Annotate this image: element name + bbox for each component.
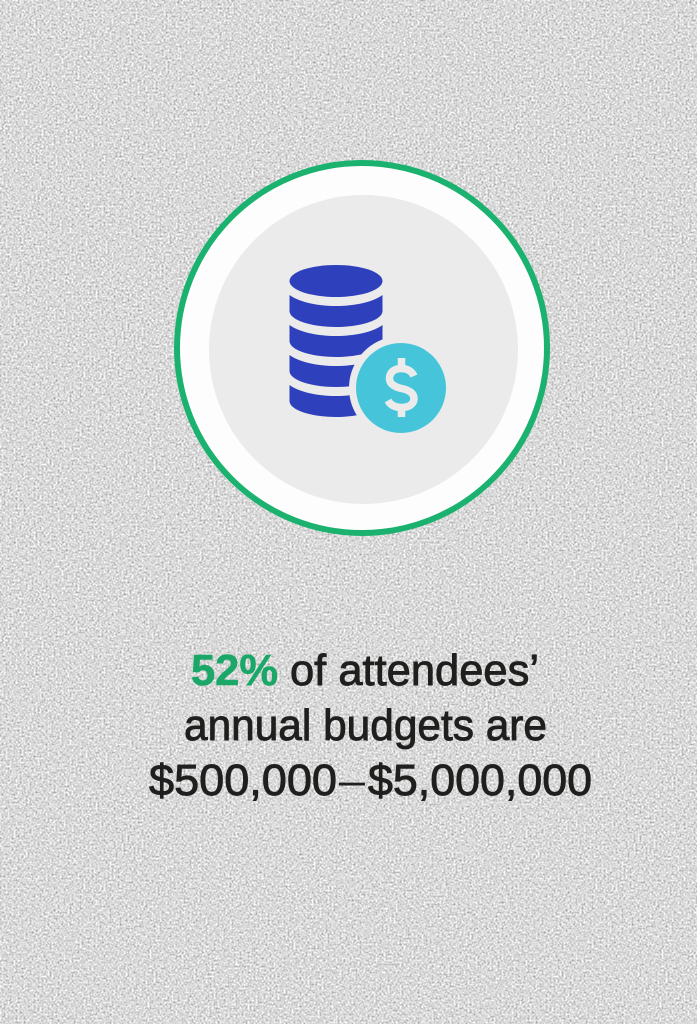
dash: —	[339, 756, 365, 805]
dollar sign	[388, 358, 414, 417]
line 3	[149, 756, 592, 805]
second amount: $5,000,000	[368, 756, 592, 805]
line 1 remainder: of attendees’	[290, 646, 539, 695]
line 1: 52% of attendees	[191, 646, 539, 695]
inner grey circle	[209, 195, 518, 504]
outer white circle with green ring	[177, 163, 547, 533]
caption text	[149, 646, 592, 805]
coin stack	[290, 265, 382, 417]
line 2: annual budgets are	[184, 701, 547, 750]
first amount: $500,000	[149, 756, 337, 805]
badge: circular icon medallion	[177, 163, 547, 533]
dollar coin	[356, 343, 446, 433]
icon: stack of coins with dollar	[290, 265, 446, 433]
highlighted stat: 52%	[191, 646, 278, 695]
